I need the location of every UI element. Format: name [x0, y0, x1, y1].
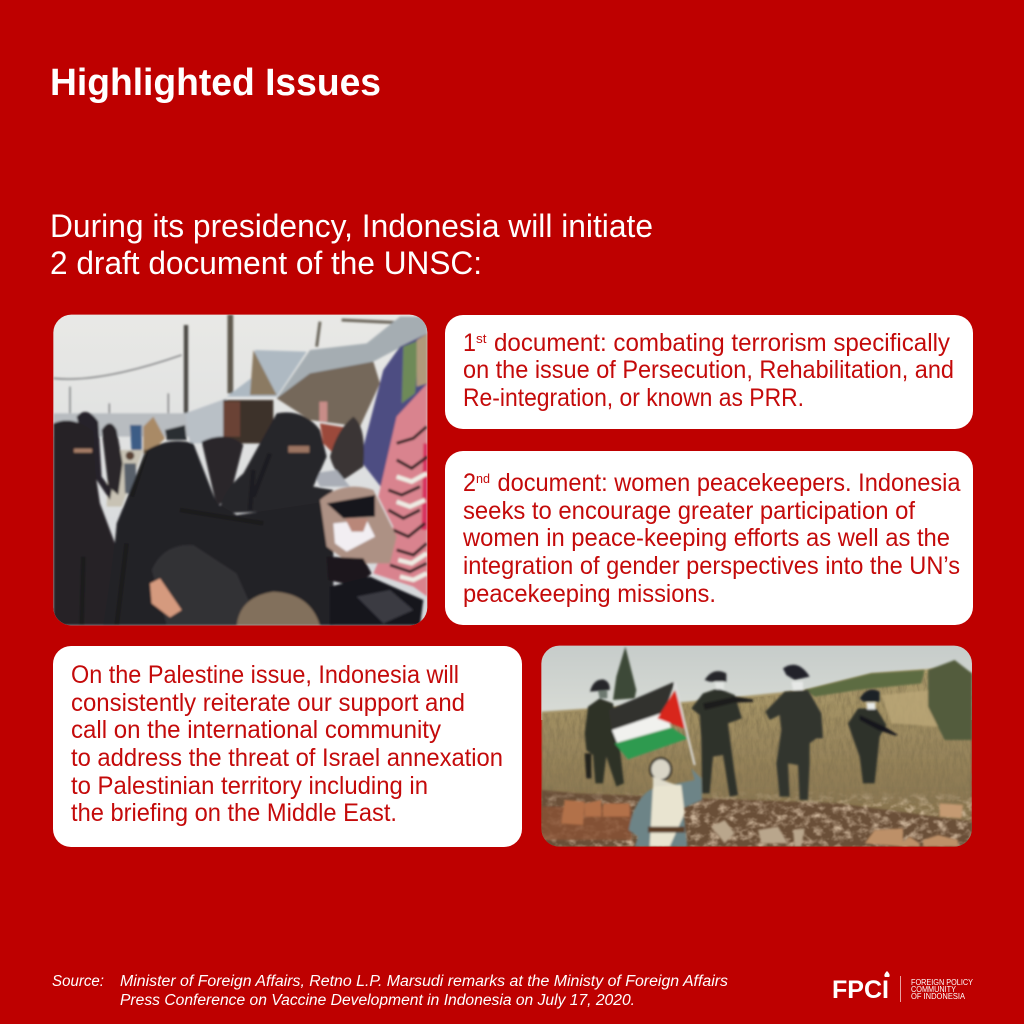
- photo: Palestinian flag and soldiers: [538, 640, 978, 847]
- intro text: During its presidency, Indonesia will initiate: [50, 208, 653, 244]
- logo: FPCI: FOREIGN POLICY: [911, 977, 973, 987]
- card: second document: women in peace-keeping efforts as well as the: [462, 524, 950, 552]
- card: second document: document: women peacekeepers. Indonesia: [498, 469, 961, 497]
- source note: Press Conference on Vaccine Development in Indonesia on July 17, 2020.: [120, 992, 635, 1009]
- card: second document: [445, 451, 973, 625]
- source note: [52, 973, 728, 1009]
- card: Palestine issue: call on the international community: [71, 716, 441, 744]
- card: second document: integration of gender perspectives into the UN’s: [463, 552, 960, 580]
- card: first document: on the issue of Persecution, Rehabilitation, and: [463, 356, 954, 384]
- card: Palestine issue: On the Palestine issue, Indonesia will: [71, 661, 459, 689]
- source note: Source:: [52, 973, 104, 990]
- title: Highlighted Issues: [50, 62, 381, 104]
- card: first document: st: [476, 331, 487, 346]
- card: first document: Re-integration, or known as PRR.: [463, 384, 804, 412]
- source note: Minister of Foreign Affairs, Retno L.P. Marsudi remarks at the Ministy of Foreign Affairs: [120, 973, 728, 990]
- card: first document: 1: [463, 329, 476, 357]
- card: Palestine issue: to address the threat of Israel annexation: [71, 744, 503, 772]
- card: first document: document: combating terrorism specifically: [494, 329, 950, 357]
- card: second document: nd: [476, 471, 490, 486]
- logo: FPCI: OF INDONESIA: [911, 991, 965, 1001]
- card: Palestine issue: the briefing on the Middle East.: [71, 799, 397, 827]
- logo: FPCI: FPCI: [832, 976, 889, 1004]
- card: second document: seeks to encourage greater participation of: [463, 497, 915, 525]
- card: Palestine issue: consistently reiterate our support and: [71, 689, 465, 717]
- card: first document: [445, 315, 973, 429]
- photo: women in camp: [50, 310, 433, 627]
- card: Palestine issue: [53, 646, 522, 847]
- card: Palestine issue: to Palestinian territory including in: [71, 772, 428, 800]
- intro text: [50, 208, 653, 281]
- intro text: 2 draft document of the UNSC:: [50, 245, 482, 281]
- logo: FPCI: COMMUNITY: [911, 984, 956, 994]
- card: second document: peacekeeping missions.: [463, 580, 716, 608]
- card: second document: 2: [463, 469, 476, 497]
- logo: FPCI: [832, 971, 973, 1004]
